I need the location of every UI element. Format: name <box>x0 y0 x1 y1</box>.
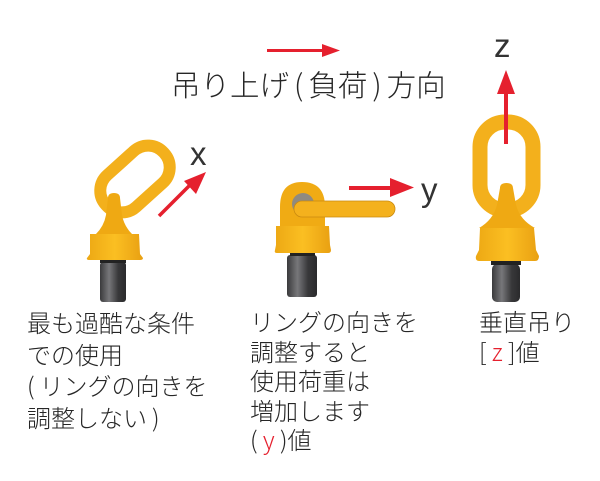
label x: x <box>190 135 207 172</box>
text block: left caption: 最も過酷な条件 <box>27 304 195 339</box>
label z: z <box>494 27 510 64</box>
text block: middle caption: リングの向きを <box>250 303 418 338</box>
text block: right caption: 垂直吊り <box>479 303 575 338</box>
text block: middle caption: 使用荷重は <box>250 362 370 397</box>
hoist ring z: vertical <box>476 122 539 302</box>
arrow x: diagonal red <box>159 172 206 216</box>
text block: middle caption: ( y )値 <box>250 421 312 456</box>
title: 吊り上げ(負荷)方向 <box>171 63 446 105</box>
text block: middle caption <box>250 303 418 456</box>
hoist ring x: angled <box>87 137 178 302</box>
legend arrow: red <box>267 44 340 57</box>
arrow z: vertical red <box>497 70 515 144</box>
hoist ring y: sideways <box>275 182 395 297</box>
text block: left caption: 調整しない) <box>27 398 160 434</box>
text block: left caption: での使用 <box>27 336 123 370</box>
text block: middle caption: 増加します <box>250 392 370 426</box>
text block: right caption <box>479 303 575 368</box>
label y: y <box>421 171 438 208</box>
arrow y: red <box>349 178 414 197</box>
text block: middle caption: 調整すると <box>250 332 370 368</box>
text block: right caption: [ z ]値 <box>479 333 540 368</box>
text block: left caption: (リングの向きを <box>27 367 208 402</box>
text block: left caption <box>27 304 208 434</box>
